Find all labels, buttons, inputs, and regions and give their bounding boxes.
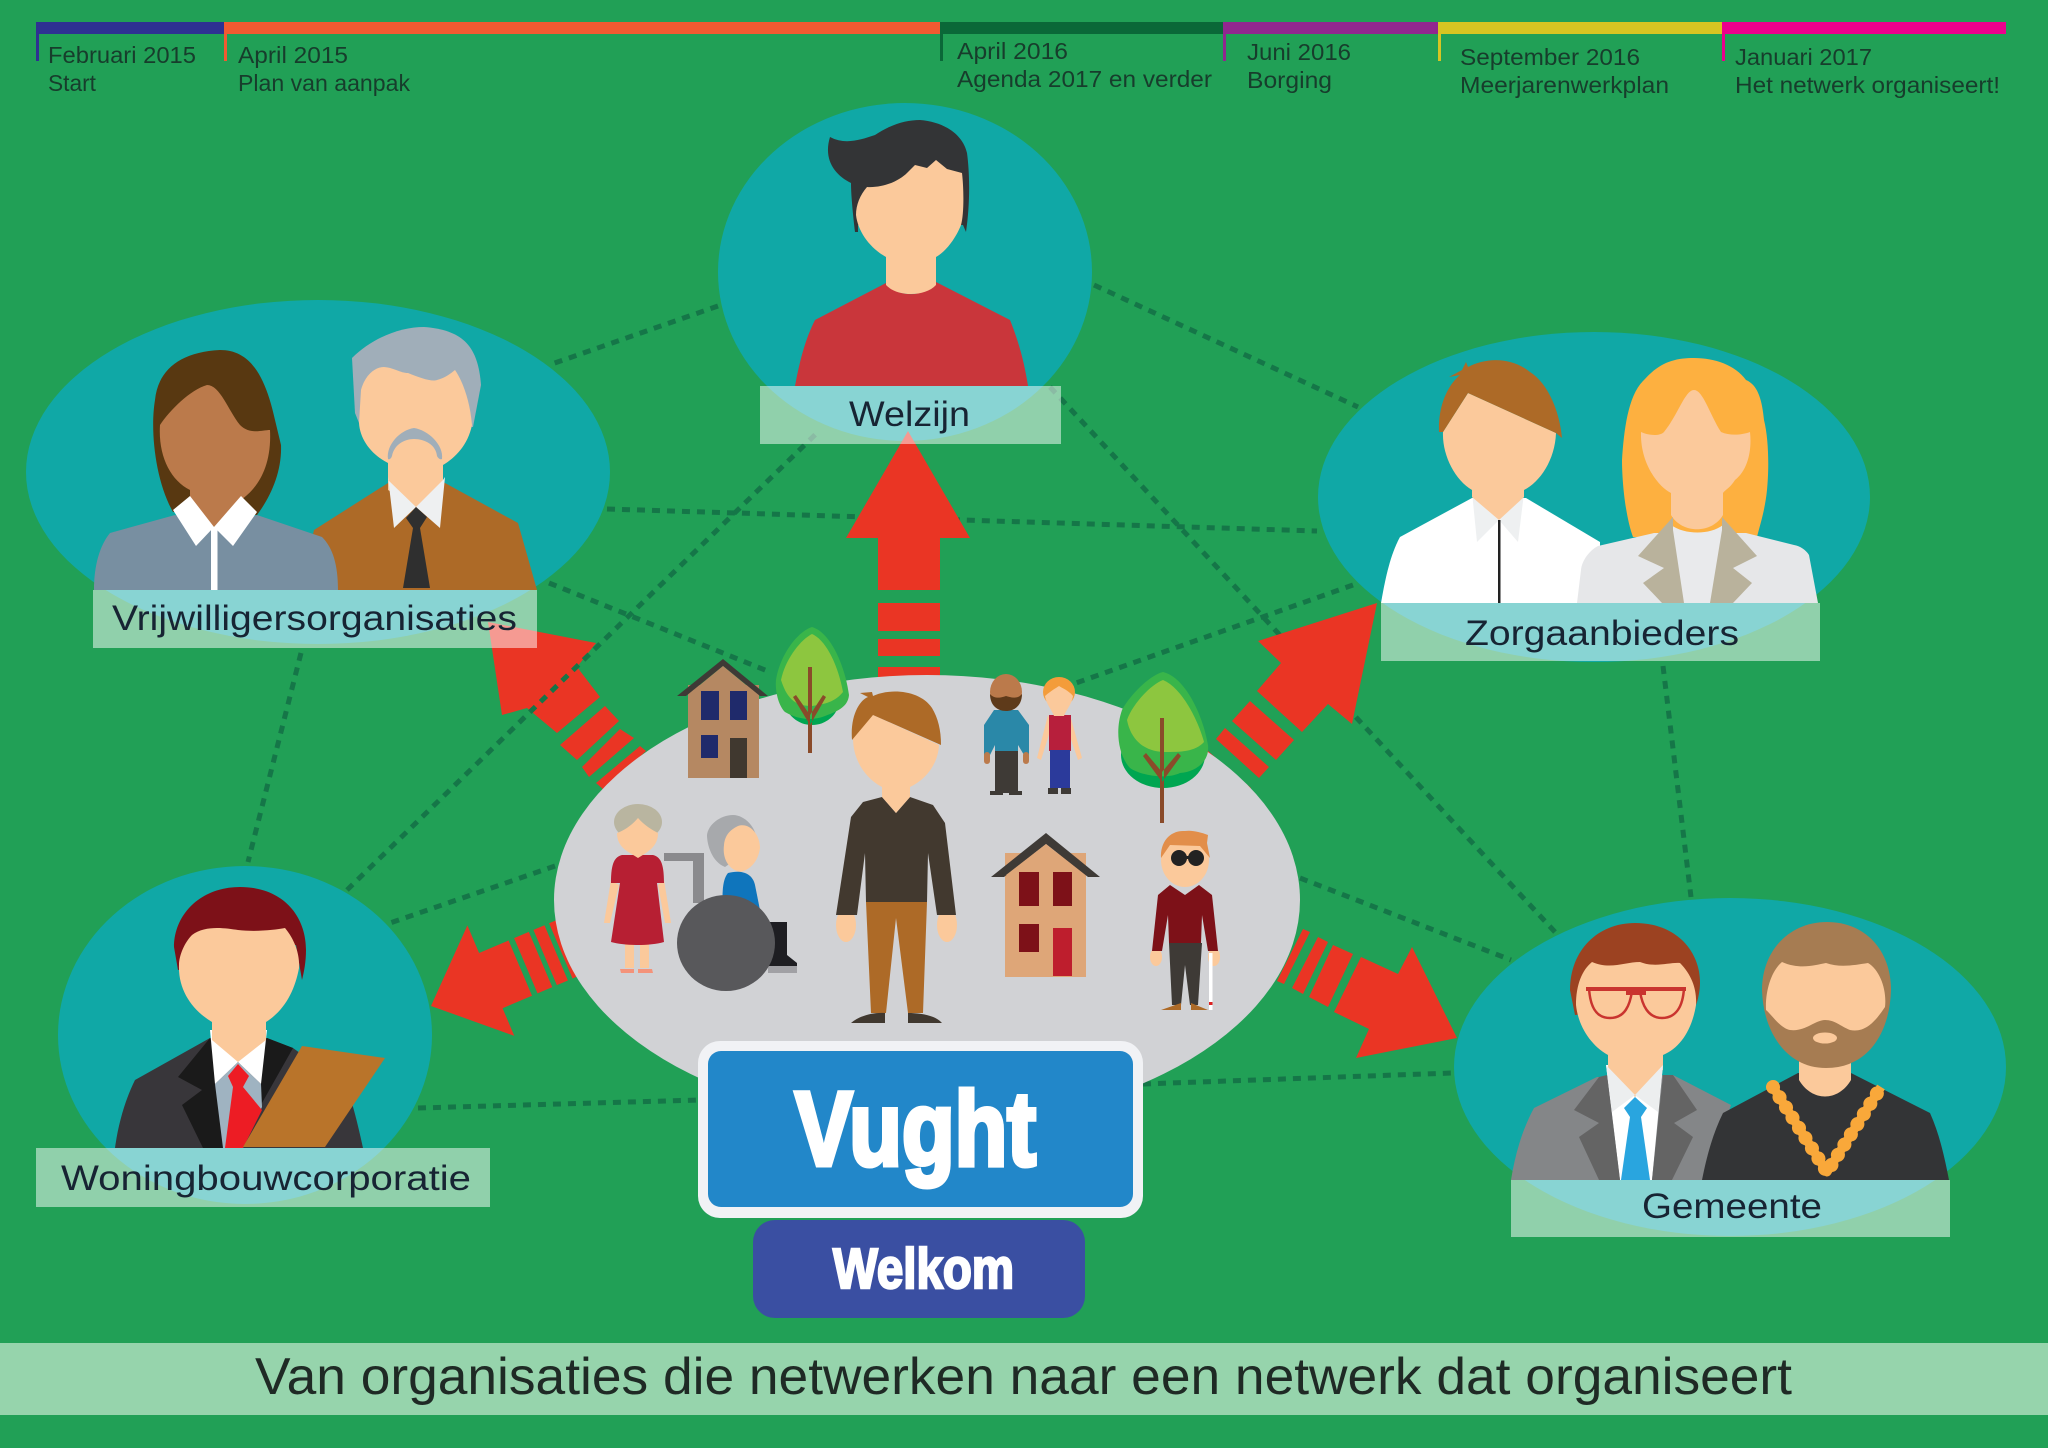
man with glasses and blue tie [1511,923,1731,1180]
timeline: April 2015: April 2015 [238,42,348,68]
label: Woningbouwcorporatie [36,1148,490,1207]
person with red shirt [795,120,1028,386]
sign: Welkom [753,1220,1085,1318]
person: blind man with cane [1150,831,1220,1010]
timeline: Februari 2015: Start [48,70,96,96]
person: central man [836,692,957,1023]
label: Vrijwilligersorganisaties [93,590,537,648]
network lines behind arrows [248,285,1691,1108]
woman with brown hair [94,350,338,590]
timeline: Januari 2017: Het netwerk organiseert! [1735,72,2000,98]
timeline: Februari 2015: Februari 2015 [48,42,196,68]
arrow to Welzijn [846,431,970,681]
person: wheelchair user [664,815,797,991]
icon: tree right [1118,672,1208,823]
title banner [0,1343,2048,1415]
labels on panels [36,386,1950,1237]
label: Gemeente: Gemeente [1642,1187,1822,1226]
arrow to Woningbouwcorporatie [408,889,599,1061]
label: Vrijwilligersorganisaties: Vrijwilligersorganisaties [112,599,517,638]
arrow to Zorgaanbieders [1195,603,1377,795]
timeline: September 2016 [1438,22,1722,98]
place name sign: Vught [698,1041,1143,1218]
panel: Welzijn [718,103,1092,441]
label: Welzijn [760,386,1061,444]
place name sign: Vught: Vught [795,1071,1036,1188]
person: woman in red top [1037,677,1082,794]
label: Welzijn: Welzijn [849,395,970,434]
panel: Vrijwilligersorganisaties [26,300,610,644]
title banner: Van organisaties die netwerken naar een netwerk dat organiseert [255,1348,1793,1406]
network line over arrow [347,430,820,890]
man with grey hair [300,327,537,590]
person: older woman in red dress [604,804,671,973]
panel: Zorgaanbieders [1318,332,1870,662]
arrows [408,431,1457,1061]
timeline: April 2016 [940,22,1223,92]
panel: Gemeente [1454,898,2006,1236]
timeline: April 2016: Agenda 2017 en verder [957,66,1212,92]
timeline: April 2016: April 2016 [957,38,1068,64]
timeline [36,22,2006,98]
woman with blond hair [1577,358,1818,603]
arrow to Gemeente [1277,929,1457,1058]
timeline: Juni 2016 [1223,22,1438,93]
timeline: September 2016: September 2016 [1460,44,1640,70]
icon: small brown house [677,659,768,778]
label: Zorgaanbieders [1381,603,1820,661]
man in white shirt [1381,360,1600,603]
icon: tree left [776,627,849,753]
timeline: Juni 2016: Borging [1247,67,1332,93]
label: Woningbouwcorporatie: Woningbouwcorporatie [61,1159,471,1198]
panel: central community Vught [554,627,1300,1125]
timeline: April 2015 [224,22,940,96]
timeline: Januari 2017: Januari 2017 [1735,44,1872,70]
person: bearded man in teal [984,674,1029,795]
icon: large orange house [991,833,1100,977]
label: Zorgaanbieders: Zorgaanbieders [1465,614,1739,653]
timeline: Juni 2016: Juni 2016 [1247,39,1351,65]
sign: Welkom: Welkom [833,1237,1014,1301]
panel: Woningbouwcorporatie [58,866,432,1204]
label: Gemeente [1511,1180,1950,1237]
timeline: Februari 2015 [36,22,224,96]
timeline: April 2015: Plan van aanpak [238,70,410,96]
timeline: Januari 2017 [1722,22,2006,98]
man in suit with clipboard [115,887,385,1148]
timeline: September 2016: Meerjarenwerkplan [1460,72,1669,98]
bearded man with chain of office [1702,922,1949,1180]
arrow to Vrijwilligersorganisaties [488,622,646,790]
